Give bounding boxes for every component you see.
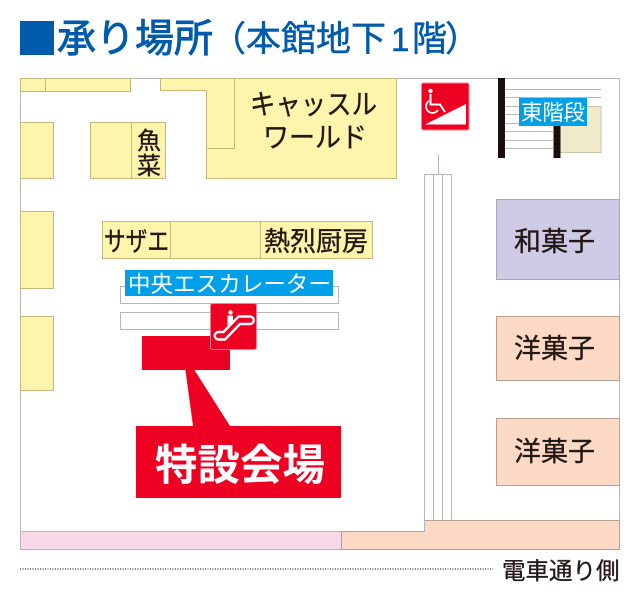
bottom shop: pink <box>20 532 342 550</box>
venue marker <box>142 336 230 370</box>
shop: fish and vegetables <box>90 122 166 180</box>
shop: Japanese sweets <box>496 200 620 280</box>
shop: fish and vegetables: 菜 <box>137 153 161 180</box>
title: （本館地下 <box>211 20 386 59</box>
floor map <box>20 78 620 550</box>
title: 1 <box>391 21 409 58</box>
street label: 電車通り側 <box>502 558 620 584</box>
shop: Western sweets 2: 洋菓子 <box>514 437 595 467</box>
callout: special venue: 特設会場 <box>155 443 325 490</box>
central stair lines <box>424 154 452 531</box>
shop: Western sweets 2 <box>496 418 620 486</box>
bottom shop: orange <box>342 520 620 550</box>
shop: castle world <box>160 78 396 178</box>
shop row: サザエ <box>104 227 169 257</box>
shop: castle world: キャッスル <box>250 89 377 120</box>
icon: escalator <box>210 304 256 350</box>
title: ） <box>445 20 480 59</box>
shop: fish and vegetables: 魚 <box>137 128 161 155</box>
east stairs: 東階段 <box>521 101 585 125</box>
callout: special venue <box>136 352 341 498</box>
shop row <box>102 222 372 258</box>
shop: castle world: ワールド <box>263 122 367 153</box>
title: 承り場所 <box>57 18 213 61</box>
floor outline <box>20 78 620 550</box>
shop: Western sweets 1: 洋菓子 <box>514 334 595 364</box>
left shops <box>20 122 54 390</box>
top left shops <box>20 78 130 92</box>
shop: Western sweets 1 <box>496 316 620 380</box>
east stairs <box>498 78 601 158</box>
shop row: 熱烈厨房 <box>264 227 368 257</box>
shop: Japanese sweets: 和菓子 <box>514 227 595 257</box>
title <box>20 18 480 61</box>
central escalator label: 中央エスカレーター <box>128 272 331 297</box>
title: 階 <box>412 20 447 59</box>
escalator outlines <box>120 286 338 330</box>
icon: wheelchair ramp <box>422 83 469 130</box>
